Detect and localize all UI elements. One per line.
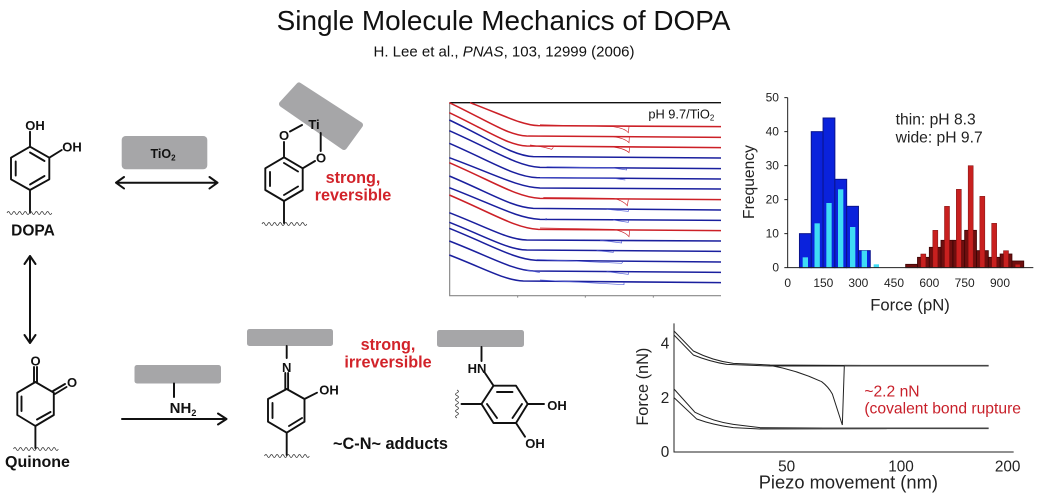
label: strong, irreversible: strong,: [361, 336, 415, 354]
structure: Quinone: Quinone: [5, 454, 70, 471]
structure: DOPA-Ti complex: Ti: [308, 117, 320, 132]
panel: TiO2 surface: TiO: [150, 147, 171, 161]
panel: amine surface with NH2: 2: [191, 408, 196, 418]
structure: amino adduct: [437, 330, 567, 451]
structure: DOPA: OH: [62, 140, 82, 154]
structure: DOPA-Ti complex: O: [316, 150, 326, 166]
x axis tick labels: 900: [990, 276, 1010, 290]
chart: force histogram: [741, 91, 1033, 315]
panel: TiO2 surface: [122, 136, 207, 169]
x axis tick labels: [784, 276, 1010, 290]
chart: force curves at pH 9.7 on TiO2: [449, 103, 721, 298]
arrow: reaction to adducts: [122, 414, 226, 424]
histogram axes: [784, 98, 1033, 268]
force plot x title: Piezo movement (nm): [759, 472, 938, 493]
label: C-N adducts: ~C-N~ adducts: [333, 435, 448, 453]
label: strong, reversible: reversible: [315, 186, 391, 204]
x axis tick labels: 300: [848, 276, 869, 290]
force plot axes: [674, 323, 1014, 452]
structure: amino adduct: HN: [468, 361, 486, 376]
x axis tick labels: 450: [884, 276, 904, 290]
force plot x tick labels: 50: [778, 459, 795, 476]
force plot y tick labels: 0: [661, 444, 669, 461]
red force traces: [449, 103, 721, 237]
title: Single Molecule Mechanics of DOPA: [277, 5, 731, 36]
citation: H. Lee et al., PNAS, 103, 12999 (2006): [373, 44, 635, 60]
blue force traces: [449, 120, 721, 285]
x axis tick labels: 600: [919, 276, 940, 290]
y axis tick labels: 40: [766, 125, 779, 139]
x axis title: Force (pN): [870, 296, 950, 315]
panel: TiO2 surface: 2: [171, 154, 176, 162]
panel: amine surface with NH2: NH: [170, 400, 191, 417]
rupture annotation: ~2.2 nN: [864, 383, 920, 400]
force plot x tick labels: 100: [888, 459, 914, 476]
structure: amino adduct: OH: [547, 398, 567, 413]
structure: amino adduct: OH: [525, 436, 545, 451]
rupture annotation: (covalent bond rupture: [864, 401, 1021, 418]
structure: Quinone: O: [67, 375, 77, 390]
structure: imine adduct: N: [282, 360, 291, 375]
structure: DOPA-Ti complex: O: [279, 128, 289, 143]
x axis tick labels: 0: [784, 276, 791, 290]
label: pH 9.7/TiO2: pH 9.7/TiO: [648, 107, 710, 122]
legend note: thin: pH 8.3: [896, 111, 976, 128]
y axis title: Frequency: [741, 145, 758, 219]
arrow: DOPA to quinone: [24, 256, 36, 343]
y axis tick labels: 20: [766, 193, 779, 207]
y axis tick labels: 30: [766, 159, 779, 173]
y axis tick labels: 50: [766, 91, 779, 105]
force plot x tick labels: [778, 459, 1020, 476]
structure: imine adduct: [247, 329, 339, 458]
force plot y tick labels: 4: [661, 336, 670, 353]
thin cyan bars: pH 8.3: [803, 189, 879, 268]
force plot y title: Force (nN): [634, 348, 652, 426]
chart: force versus piezo movement: [634, 323, 1021, 493]
legend note: wide: pH 9.7: [895, 129, 983, 146]
thin red bars: pH 8.3: [921, 166, 1020, 268]
structure: Quinone: O: [30, 354, 41, 368]
y axis tick labels: 0: [772, 261, 779, 275]
label: strong, irreversible: irreversible: [344, 354, 432, 372]
arrow: reversible TiO2 binding: [116, 177, 218, 188]
x axis tick labels: 750: [955, 276, 975, 290]
force traces: [674, 331, 989, 429]
structure: DOPA: [7, 118, 82, 240]
force plot x tick labels: 200: [995, 459, 1020, 476]
label: pH 9.7/TiO2: 2: [710, 114, 715, 123]
y axis tick labels: 10: [766, 227, 779, 241]
panel: amine surface with NH2: [134, 365, 221, 418]
wide dark red bars: pH 9.7: [906, 230, 1024, 268]
structure: DOPA-Ti complex: [262, 86, 360, 226]
label: strong, reversible: strong,: [326, 169, 380, 187]
wide blue bars: pH 9.7: [799, 118, 870, 268]
x axis tick labels: 150: [813, 276, 834, 290]
structure: DOPA: OH: [25, 118, 45, 133]
structure: Quinone: [5, 354, 77, 471]
force plot y tick labels: 2: [661, 390, 669, 407]
structure: imine adduct: OH: [319, 382, 339, 398]
structure: DOPA: DOPA: [11, 222, 55, 240]
y axis tick labels: [766, 91, 779, 275]
force plot y tick labels: [661, 336, 670, 461]
